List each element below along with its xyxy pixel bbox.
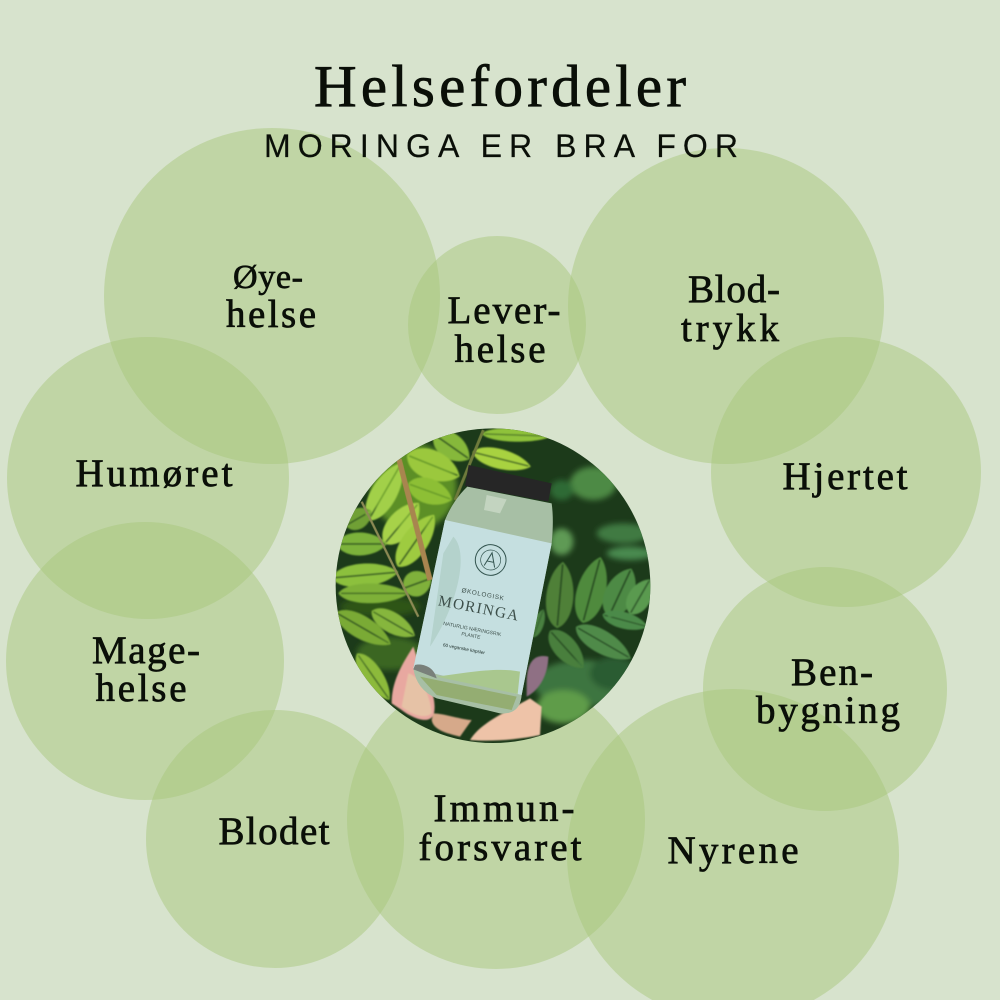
bottle text: ØKOLOGISK [461, 587, 505, 602]
label: Nyrene: Nyrene [668, 829, 798, 872]
bottle cap [465, 465, 552, 502]
label: Blodtrykk: trykk [681, 307, 780, 350]
bottle glass [413, 487, 553, 713]
label: Magehelse: Mage- [92, 629, 200, 672]
circle: Nyrene [567, 689, 899, 1000]
bottle text: NATURLIG NÆRINGSRIK [443, 621, 502, 638]
circle: Immunforsvaret [347, 671, 645, 969]
photo: hand holding moringa bottle among leaves [330, 420, 660, 750]
label: Benbygning [756, 651, 900, 732]
title: Helsefordeler [314, 53, 686, 119]
circle: Blodtrykk [568, 148, 884, 464]
label: Blodet: Blodet [218, 810, 330, 853]
label: Humøret: Humøret [76, 452, 233, 495]
label: Immunforsvaret: Immun- [434, 787, 574, 830]
circle: Magehelse [6, 522, 284, 800]
subtitle: MORINGA ER BRA FOR [264, 128, 738, 164]
circle: Hjertet [711, 337, 981, 607]
label: Leverhelse [448, 289, 560, 371]
label: Benbygning: bygning [756, 689, 900, 732]
label: Magehelse: helse [96, 667, 186, 710]
bottle logo [474, 544, 506, 576]
bottle label [413, 520, 552, 695]
label: Benbygning: Ben- [791, 651, 873, 694]
label: Blodtrykk [681, 268, 780, 350]
circle: Leverhelse [408, 236, 586, 414]
stems [399, 459, 430, 580]
hand [392, 647, 548, 741]
label: Immunforsvaret: forsvaret [418, 826, 582, 869]
leaves [330, 424, 660, 706]
label: Immunforsvaret [418, 787, 582, 869]
bottle text: PLANTE [461, 631, 482, 641]
bottle text: 60 veganske kapsler [443, 642, 486, 655]
label: Hjertet: Hjertet [782, 455, 908, 498]
label: Øyehelse: helse [226, 293, 316, 336]
label: Magehelse [92, 629, 200, 710]
label: Leverhelse: helse [454, 328, 546, 371]
circle: Benbygning [703, 567, 947, 811]
circle: Blodet [146, 710, 404, 968]
background foliage [340, 443, 653, 723]
circle: Humøret [7, 337, 289, 619]
circle: Øyehelse [104, 128, 440, 464]
label: Blodtrykk: Blod- [688, 268, 780, 311]
bottle text [438, 588, 518, 654]
label: Øyehelse [226, 259, 316, 336]
label: Leverhelse: Lever- [448, 289, 560, 332]
label: Øyehelse: Øye- [233, 259, 303, 296]
bottle text: MORINGA [437, 592, 521, 625]
